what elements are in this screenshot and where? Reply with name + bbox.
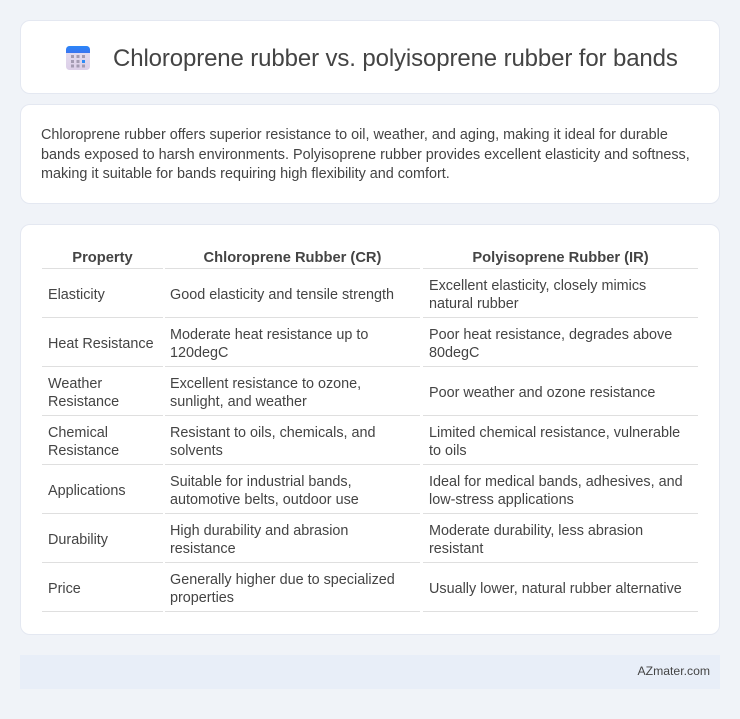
table header [72, 250, 649, 266]
row: heat resistance: 120degC [170, 345, 228, 361]
table header: Polyisoprene Rubber (IR) [472, 250, 649, 266]
row: heat resistance: Heat Resistance [48, 336, 154, 352]
row: price: Price [48, 581, 81, 597]
row: durability: resistant [429, 541, 483, 557]
footer credit: AZmater.com [638, 664, 710, 678]
row: chemical resistance: Chemical [48, 425, 108, 441]
row: heat resistance: Moderate heat resistance up to [170, 327, 368, 343]
row: price: Usually lower, natural rubber alternative [429, 581, 682, 597]
row: weather resistance: Excellent resistance to ozone, [170, 376, 361, 392]
row lines [42, 268, 698, 612]
row: heat resistance: Poor heat resistance, degrades above [429, 327, 672, 343]
icon: calendar [66, 46, 90, 70]
row: elasticity: Excellent elasticity, closely mimics [429, 278, 646, 294]
table header: Chloroprene Rubber (CR) [204, 250, 381, 266]
row: chemical resistance [48, 425, 680, 459]
row: elasticity: Good elasticity and tensile strength [170, 287, 394, 303]
table header: Property [72, 250, 133, 266]
intro text [41, 127, 690, 182]
row: weather resistance: Resistance [48, 394, 119, 410]
row: elasticity [48, 278, 646, 312]
row: chemical resistance: to oils [429, 443, 467, 459]
row: elasticity: natural rubber [429, 296, 519, 312]
intro card [20, 104, 720, 204]
row: heat resistance: 80degC [429, 345, 479, 361]
row: heat resistance [48, 327, 672, 361]
row: applications: low-stress applications [429, 492, 574, 508]
footer [20, 655, 720, 689]
row: price [48, 572, 682, 606]
title card [20, 20, 720, 94]
row: price: properties [170, 590, 234, 606]
row: weather resistance: sunlight, and weather [170, 394, 307, 410]
row: applications: Suitable for industrial bands, [170, 474, 352, 490]
row: chemical resistance: Limited chemical resistance, vulnerable [429, 425, 680, 441]
row: durability: resistance [170, 541, 236, 557]
row: weather resistance [48, 376, 655, 410]
row: chemical resistance: Resistance [48, 443, 119, 459]
intro text: making it suitable for bands requiring high flexibility and comfort. [41, 166, 450, 182]
row: applications [48, 474, 683, 508]
row: elasticity: Elasticity [48, 287, 105, 303]
row: durability: High durability and abrasion [170, 523, 348, 539]
row: applications: Applications [48, 483, 126, 499]
row: chemical resistance: Resistant to oils, chemicals, and [170, 425, 376, 441]
row: weather resistance: Weather [48, 376, 102, 392]
row: durability [48, 523, 643, 557]
row: durability: Moderate durability, less abrasion [429, 523, 643, 539]
row: applications: Ideal for medical bands, adhesives, and [429, 474, 683, 490]
row: chemical resistance: solvents [170, 443, 223, 459]
intro text: bands exposed to harsh environments. Polyisoprene rubber provides excellent elasticity and softness, [41, 146, 690, 162]
intro text: Chloroprene rubber offers superior resistance to oil, weather, and aging, making it ideal for durable [41, 127, 668, 143]
title: Chloroprene rubber vs. polyisoprene rubber for bands [113, 45, 678, 72]
row: weather resistance: Poor weather and ozone resistance [429, 385, 655, 401]
row: durability: Durability [48, 532, 108, 548]
table card [20, 224, 720, 635]
row: applications: automotive belts, outdoor use [170, 492, 359, 508]
row: price: Generally higher due to specialized [170, 572, 395, 588]
